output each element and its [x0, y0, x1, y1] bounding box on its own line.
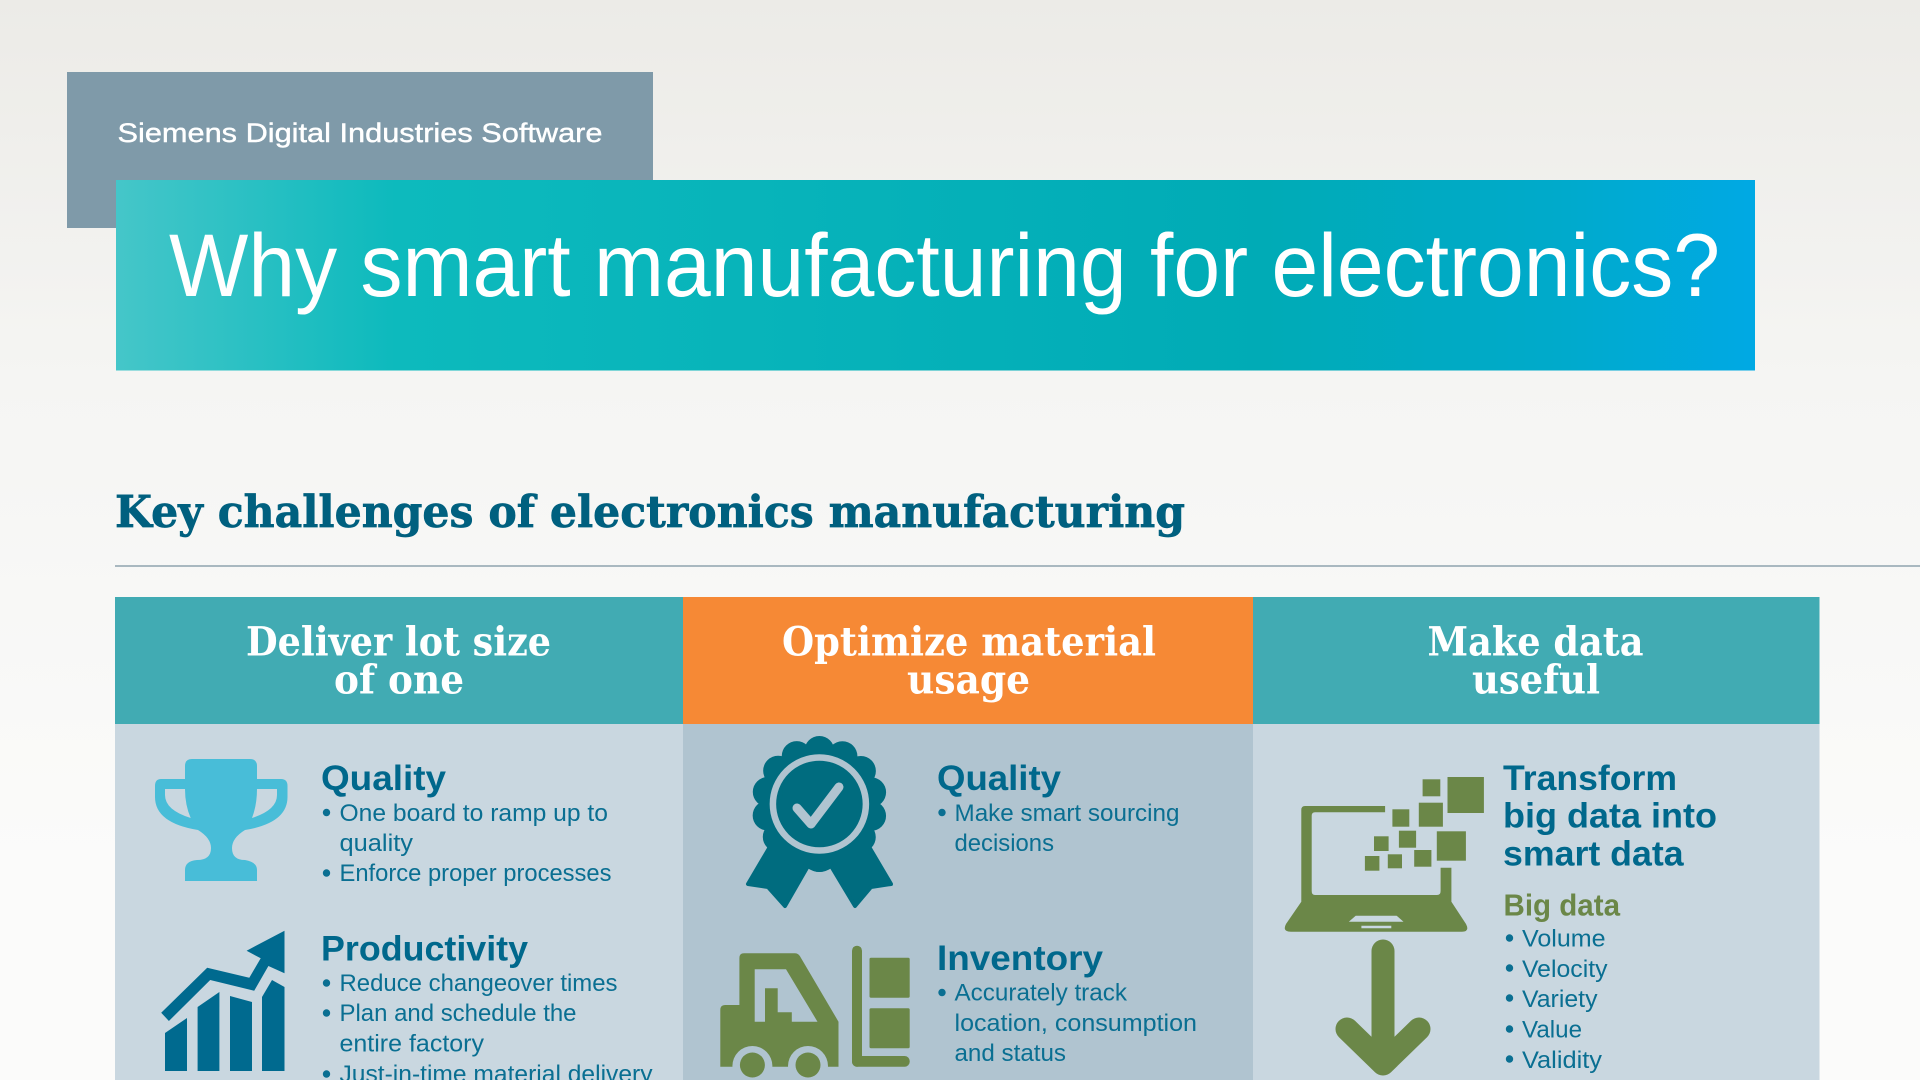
- text: big data list: Velocity: [1522, 956, 1608, 983]
- text: quality: Make smart sourcing: [954, 800, 1180, 827]
- text: inventory: and status: [954, 1040, 1066, 1067]
- title banner: Why smart manufacturing for electronics?: [169, 215, 1720, 315]
- text: productivity: [321, 930, 653, 1080]
- text: productivity: Productivity: [321, 930, 529, 969]
- text: quality: [321, 759, 612, 887]
- text: big data list: [1504, 888, 1621, 1074]
- title banner: [116, 180, 1755, 370]
- icon: growth chart: [161, 931, 284, 1071]
- text: transform big data: [1503, 759, 1717, 874]
- text: big data list: Big data: [1504, 888, 1621, 923]
- panel: optimize material usage: [683, 597, 1253, 1080]
- header: deliver lot size of one: Deliver lot size: [246, 618, 551, 666]
- text: inventory: [937, 939, 1197, 1067]
- text: inventory: Inventory: [937, 939, 1104, 978]
- header: optimize material usage: [683, 597, 1253, 724]
- text: big data list: Value: [1522, 1017, 1582, 1044]
- text: transform big data: smart data: [1503, 835, 1684, 874]
- panel: deliver lot size of one: [115, 597, 683, 1080]
- text: big data list: Volume: [1522, 926, 1606, 953]
- brand tab: [67, 72, 653, 228]
- text: quality: [937, 759, 1180, 857]
- header: optimize material usage: usage: [907, 656, 1030, 704]
- text: quality: decisions: [954, 830, 1054, 857]
- header: make data useful: [1253, 597, 1820, 724]
- header: make data useful: Make data: [1428, 618, 1644, 666]
- panel: make data useful: [1253, 597, 1820, 1080]
- header: optimize material usage: Optimize material: [782, 618, 1156, 666]
- text: quality: One board to ramp up to: [340, 800, 608, 827]
- arrow: down: [1347, 951, 1419, 1064]
- header: deliver lot size of one: [115, 597, 683, 724]
- text: big data list: Variety: [1522, 986, 1598, 1013]
- brand tab: Siemens Digital Industries Software: [118, 118, 602, 148]
- text: quality: Quality: [937, 759, 1062, 798]
- icon: trophy: [155, 759, 288, 881]
- section heading: Key challenges of electronics manufacturing: [115, 487, 1185, 538]
- icon: forklift: [720, 946, 910, 1080]
- text: big data list: Validity: [1522, 1047, 1603, 1074]
- text: productivity: Reduce changeover times: [340, 970, 618, 997]
- text: productivity: entire factory: [340, 1031, 485, 1058]
- text: quality: quality: [340, 830, 414, 857]
- text: quality: Enforce proper processes: [340, 860, 612, 887]
- header: make data useful: useful: [1472, 656, 1600, 704]
- text: transform big data: big data into: [1503, 797, 1717, 836]
- text: transform big data: Transform: [1503, 759, 1677, 798]
- icon: quality rosette: [748, 744, 891, 906]
- text: inventory: Accurately track: [954, 980, 1128, 1007]
- text: productivity: Plan and schedule the: [340, 1000, 576, 1027]
- header: deliver lot size of one: of one: [334, 656, 464, 704]
- text: inventory: location, consumption: [954, 1010, 1197, 1037]
- icon: laptop with data squares: [1285, 777, 1484, 932]
- text: quality: Quality: [321, 759, 447, 798]
